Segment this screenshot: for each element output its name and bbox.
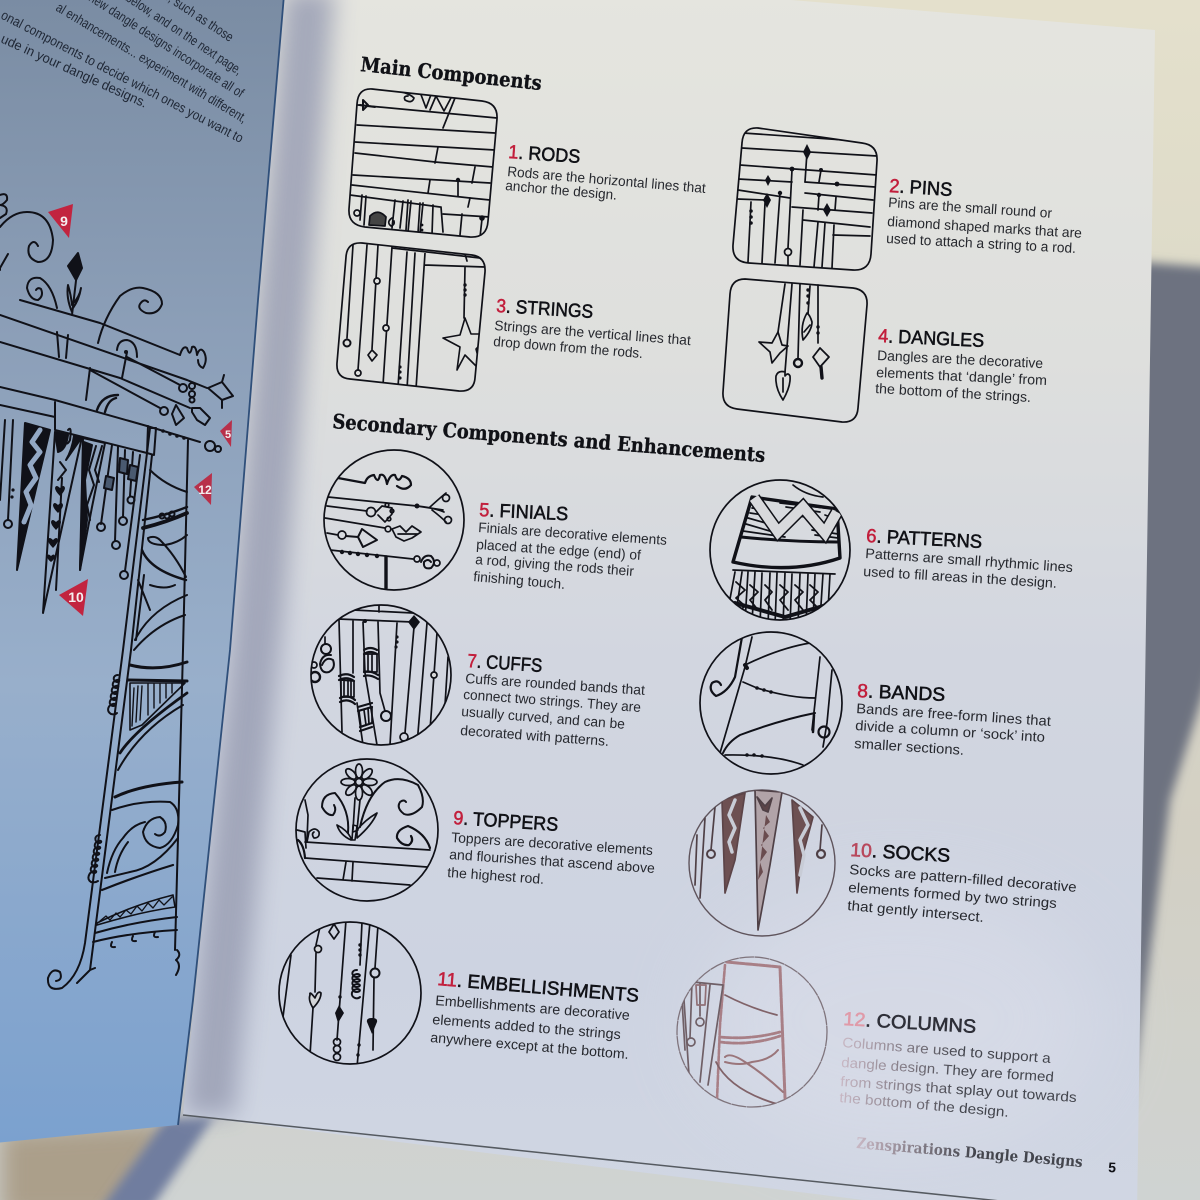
- red marker 12: 12: [198, 483, 212, 497]
- panel: left page: [0, 0, 284, 1143]
- red marker 9: [48, 204, 73, 238]
- description: [473, 519, 667, 592]
- description: decorated with patterns.: [460, 722, 610, 749]
- description: smaller sections.: [854, 735, 965, 758]
- description: Columns are used to support a: [842, 1034, 1052, 1066]
- description: from strings that splay out towards: [840, 1073, 1077, 1105]
- heading: 6. PATTERNS: [866, 526, 983, 553]
- icon: dangles tile: [723, 279, 867, 422]
- item 10: socks: [689, 790, 1078, 936]
- item 4: dangles: [723, 279, 1047, 422]
- description: Pins are the small round or: [888, 194, 1053, 221]
- description: elements added to the strings: [432, 1011, 621, 1042]
- description: [854, 700, 1052, 758]
- item 8: bands: [700, 632, 1052, 774]
- description: [863, 545, 1073, 591]
- description: Rods are the horizontal lines that: [507, 163, 706, 196]
- icon: finials circle: [324, 450, 464, 590]
- icon: patterns circle: [710, 480, 850, 625]
- icon: bands circle: [700, 632, 842, 774]
- icon: embellishments circle: [279, 920, 421, 1067]
- heading: secondary components: Secondary Components and Enhancements: [332, 409, 766, 467]
- description: [875, 347, 1047, 405]
- item 7: cuffs: [310, 605, 646, 749]
- description: and flourishes that ascend above: [449, 846, 656, 876]
- description: [447, 829, 656, 887]
- description: the highest rod.: [447, 864, 545, 887]
- description: Patterns are small rhythmic lines: [865, 545, 1073, 575]
- left page body text: al enhancements... experiment with different,: [53, 0, 250, 126]
- column: [48, 440, 188, 989]
- rods and finials: [0, 300, 233, 453]
- description: used to fill areas in the design.: [863, 563, 1057, 591]
- description: dangle design. They are formed: [841, 1054, 1054, 1085]
- icon: cuffs circle: [310, 605, 451, 745]
- heading: 9. TOPPERS: [453, 808, 559, 836]
- description: anywhere except at the bottom.: [430, 1029, 629, 1062]
- icon: strings tile: [337, 243, 490, 391]
- description: Finials are decorative elements: [478, 519, 667, 548]
- heading: 3. STRINGS: [496, 296, 594, 323]
- description: [430, 992, 631, 1062]
- item 6: patterns: [710, 480, 1073, 625]
- heading: 5. FINIALS: [479, 500, 569, 525]
- heading: 4. DANGLES: [878, 326, 985, 352]
- socks: [17, 423, 105, 613]
- heading: 2. PINS: [889, 176, 953, 201]
- description: anchor the design.: [505, 177, 618, 203]
- left page body text: ude in your dangle designs.: [0, 31, 150, 111]
- description: placed at the edge (end) of: [476, 536, 642, 563]
- icon: socks circle: [689, 790, 835, 936]
- description: Bands are free-form lines that: [856, 700, 1052, 729]
- icon: rods tile: [349, 89, 497, 237]
- red marker 12: [194, 473, 212, 505]
- heading: main components: Main Components: [359, 52, 543, 95]
- item 1: rods: [349, 89, 706, 237]
- description: connect two strings. They are: [463, 686, 642, 715]
- description: Strings are the vertical lines that: [494, 317, 692, 348]
- description: Toppers are decorative elements: [451, 829, 653, 858]
- item 3: strings: [337, 243, 692, 391]
- description: usually curved, and can be: [461, 703, 626, 732]
- description: divide a column or ‘sock’ into: [855, 717, 1046, 745]
- description: Embellishments are decorative: [435, 992, 631, 1023]
- red marker 5: [220, 420, 232, 447]
- description: the bottom of the strings.: [875, 380, 1031, 405]
- description: elements that ‘dangle’ from: [876, 364, 1047, 388]
- description: [839, 1034, 1077, 1120]
- description: finishing touch.: [473, 568, 566, 592]
- toppers: [0, 194, 162, 357]
- red marker 9: 9: [60, 213, 68, 229]
- description: drop down from the rods.: [493, 333, 644, 361]
- item 11: embellishments: [279, 920, 640, 1067]
- footer title: Zenspirations Dangle Designs: [856, 1134, 1083, 1171]
- heading: 10. SOCKS: [850, 840, 951, 867]
- description: a rod, giving the rods their: [475, 551, 635, 579]
- heading: 1. RODS: [508, 142, 581, 168]
- left page body text: onal components to decide which ones you want to: [0, 7, 246, 146]
- description: Cuffs are rounded bands that: [465, 670, 646, 698]
- item 2: pins: [733, 128, 1083, 270]
- strings with dangles: [0, 420, 156, 579]
- heading: 7. CUFFS: [467, 651, 543, 677]
- red marker 5: 5: [225, 429, 231, 441]
- heading: 12. COLUMNS: [843, 1009, 977, 1038]
- heading: 8. BANDS: [857, 681, 946, 706]
- description: that gently intersect.: [847, 897, 985, 925]
- description: diamond shaped marks that are: [887, 213, 1083, 241]
- description: [886, 194, 1083, 256]
- heading: 11. EMBELLISHMENTS: [437, 969, 640, 1007]
- icon: toppers circle: [296, 759, 438, 901]
- description: Dangles are the decorative: [877, 347, 1044, 371]
- item 5: finials: [324, 450, 667, 592]
- red marker 10: 10: [68, 589, 84, 605]
- description: used to attach a string to a rod.: [886, 230, 1076, 256]
- description: the bottom of the design.: [839, 1089, 1009, 1120]
- table shadow right: [1130, 262, 1200, 1110]
- item 9: toppers: [296, 759, 656, 901]
- item 12: columns: [677, 957, 1077, 1120]
- description: [847, 861, 1078, 925]
- page number: 5: [1108, 1159, 1117, 1175]
- table shadow lower left: [0, 1115, 215, 1200]
- icon: columns circle: [677, 957, 827, 1107]
- description: Socks are pattern-filled decorative: [849, 861, 1078, 895]
- icon: pins tile: [733, 128, 877, 270]
- description: elements formed by two strings: [848, 879, 1057, 911]
- red marker 10: [59, 579, 88, 616]
- description: [460, 670, 646, 749]
- dangle design illustration: [0, 194, 233, 989]
